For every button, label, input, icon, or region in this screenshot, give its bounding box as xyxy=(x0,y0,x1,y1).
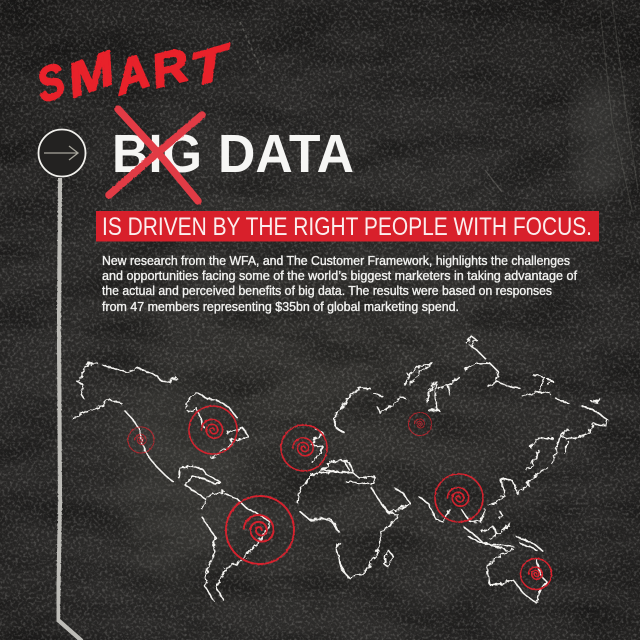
red cross over BIG xyxy=(109,109,202,201)
map: Americas xyxy=(73,363,349,600)
handwritten word: SMART: S xyxy=(32,52,70,113)
intro text block: the actual and perceived benefits of big data. The results were based on responses xyxy=(102,284,552,298)
location markers xyxy=(128,406,552,590)
intro text block: New research from the WFA, and The Customer Framework, highlights the challenges xyxy=(102,254,570,268)
intro text block xyxy=(102,254,578,314)
heading: BIG DATA xyxy=(112,124,354,184)
marker: Russia xyxy=(408,412,432,436)
intro text block: and opportunities facing some of the world’s biggest marketers in taking advantage of xyxy=(102,269,578,283)
heading: BIG DATA: BIG xyxy=(112,124,202,184)
marker: Asia xyxy=(435,474,483,522)
heading: BIG DATA: DATA xyxy=(218,124,354,184)
handwritten word: SMART: T xyxy=(188,33,234,97)
marker: North America east xyxy=(189,406,237,454)
marker: Europe xyxy=(281,425,327,471)
map: Eurasia, Africa, Australia xyxy=(320,337,608,603)
handwritten word: SMART: A xyxy=(109,43,155,105)
handwritten word: SMART: R xyxy=(146,38,193,98)
chalk timeline line xyxy=(58,178,82,640)
marker: South America xyxy=(226,496,294,564)
intro text block: from 47 members representing $35bn of global marketing spend. xyxy=(102,300,459,314)
world map chalk outline xyxy=(73,337,608,603)
marker: Australia xyxy=(520,558,552,590)
marker: North America west xyxy=(128,427,154,453)
handwritten word: SMART xyxy=(32,33,234,113)
handwritten word: SMART: M xyxy=(61,40,122,108)
icon: arrow in chalk circle xyxy=(38,130,86,176)
